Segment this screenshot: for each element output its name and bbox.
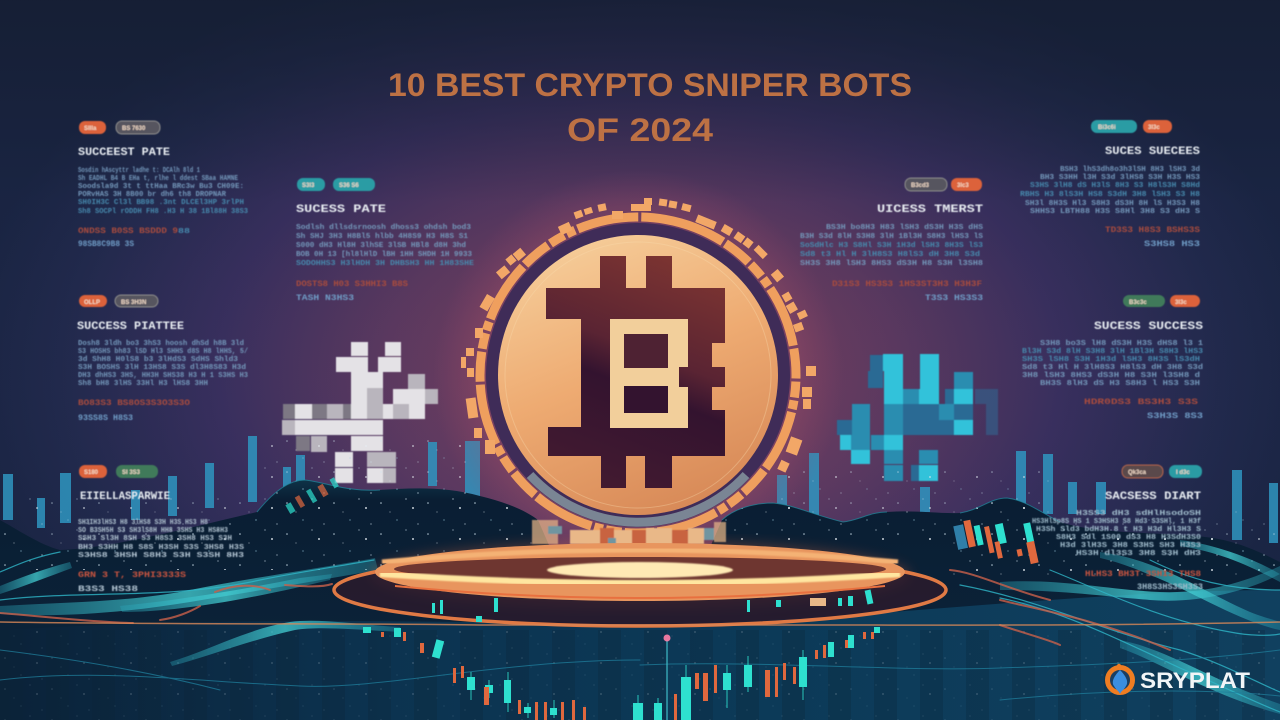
body text: Sh EADHL B4 B EHa t, rlhe l ddest SBaa HAMNE: [78, 175, 238, 183]
body text: Sd8 t3 Hl H 3lH8S3 H8lS3 dH 3H8 S3d: [1022, 364, 1203, 372]
logo: [1108, 664, 1251, 694]
outer ring: [334, 554, 946, 626]
body text: [1022, 340, 1203, 388]
highlight lines: [78, 227, 190, 249]
body text: SODOHHS3 H3lHDH 3H DHBSH3 HH 1H83SHE: [296, 260, 474, 268]
dark hills: [0, 440, 1280, 640]
body text: [78, 167, 248, 216]
body text: SH3l 8H3S Hl3 S8H3 dS3H 8H lS H3S3 H8: [1025, 200, 1200, 208]
logo wordmark: SRYPLAT: [1140, 668, 1251, 693]
body text: Sosdin hAscyttr ladhe t: DCAlh 8ld 1: [78, 167, 200, 175]
panel: left top: [78, 121, 248, 249]
pixel figure: white: [282, 342, 438, 483]
bright core: [547, 562, 733, 578]
lower sea grid: [0, 590, 1280, 720]
highlight lines: [296, 280, 408, 303]
highlight lines: [1105, 226, 1200, 249]
ring lower arc: [530, 475, 746, 522]
body text: SH0IH3C Cl3l BB98 .3nt DLCEl3HP 3rlPH: [78, 199, 244, 207]
heading: SUCCEEST PATE: [78, 147, 170, 159]
glyph centre block: [610, 319, 688, 428]
panel: right third: [1022, 295, 1203, 421]
body text: SO B3SH5H S3 SH3lS8H HH8 3SHS H3 HS8H3: [78, 527, 228, 535]
highlight lines: HDR0DS3 BS3H3 S3S: [1084, 398, 1198, 407]
coin halo: [433, 170, 843, 580]
body text: Sd8 t3 Hl H 3lH8S3 H8lS3 dH 3H8 S3d: [800, 251, 980, 259]
body text: [78, 519, 244, 560]
body text: Sh SHJ 3H3 H8Bl5 hlbb 4H8S9 H3 H8S S1: [296, 233, 468, 241]
body text: SH3IH3lHS3 H8 3lHS8 S3H H3S HS3 H8: [78, 519, 208, 527]
heading: UICESS TMERST: [877, 204, 983, 216]
heading: SUCESS SUCCESS: [1094, 321, 1203, 333]
pills: [79, 121, 160, 134]
highlight lines: B3S3 HS38: [78, 585, 138, 594]
pills: 3I3c: [1175, 300, 1187, 306]
highlight lines: ONDSS B0SS BSDDD 9: [78, 227, 178, 236]
body text: Dosh8 3ldh bo3 3hS3 hoosh dhSd h8B 3ld: [78, 340, 244, 348]
title: [388, 67, 912, 148]
highlight lines: T3S3 HS3S3: [925, 294, 983, 303]
pills: SI 3S3: [122, 470, 141, 476]
heading: EIIELLASPARWIE: [80, 491, 170, 503]
orange and red streaks: [0, 570, 1170, 650]
highlight lines: TASH N3HS3: [296, 294, 354, 303]
body text: [1032, 510, 1201, 558]
body text: S3H8 bo3S lH8 dS3H H3S dHS8 l3 1: [1040, 340, 1203, 348]
body text: 3H8 lSH3 8HS3 dS3H H8 S3H l3SH8 d: [1022, 372, 1200, 380]
panel: right second: [800, 178, 983, 303]
platform glow: [370, 541, 910, 609]
body text: [800, 224, 983, 268]
title: 10 BEST CRYPTO SNIPER BOTS: [388, 67, 912, 103]
body text: H3Sh Sld3 bdH3H 8 t H3 H3d Hl3H3 S: [1036, 526, 1201, 534]
pills: OLLP: [84, 300, 100, 306]
body text: Sodlsh dllsdsrnoosh dhoss3 ohdsh bod3: [296, 224, 471, 232]
body text: Soodsla9d 3t t ttHaa BRc3w Bu3 CH09E:: [78, 183, 244, 191]
inner ring: [375, 543, 905, 601]
pills: S36 S6: [339, 183, 359, 189]
pills: 3Ic3: [957, 183, 969, 189]
hill candles right: [953, 508, 1039, 578]
segmented outer ring: [455, 192, 821, 558]
body text: S3HS8 3HSH S8H3 S3H S3SH 8H3: [78, 552, 244, 560]
body text: RBHS H3 8lS3H HS8 S3dH 3H8 lSH3 S3 H8: [1020, 191, 1200, 199]
price marker line: [664, 634, 670, 720]
panel: right fourth: [1032, 465, 1203, 592]
body text: [1020, 166, 1200, 216]
bitcoin glyph: [546, 256, 725, 488]
body text: BOB 0H 13 [hl8lHlD lBH 1HH SHDH 1H 9933: [296, 251, 472, 259]
highlight lines: HLHS3 BH3T 3SHI3 THS8: [1085, 570, 1201, 579]
pills: B3cd3: [911, 183, 930, 189]
heading: SUCES SUECEES: [1105, 146, 1200, 158]
panel: left second: [296, 178, 474, 303]
candles under platform: [432, 590, 873, 622]
body text: HS3HlSp8S HS 1 S3HSH3 S8 Hd3 S3SHl, 1 H3f: [1032, 518, 1201, 526]
body text: [78, 340, 248, 388]
body text: SH3S lSH8 S3H 1H3d lSH3 8H3S lS3dH: [1022, 356, 1200, 364]
panel: left third: [77, 295, 248, 423]
panel: right top: [1020, 120, 1200, 249]
highlight lines: S3H3S 8S3: [1147, 412, 1203, 421]
pills: [905, 178, 982, 191]
pills: Qk3ca: [1128, 470, 1147, 476]
body text: SH3S 3H8 lSH3 8HS3 dS3H H8 S3H l3SH8: [800, 260, 983, 268]
body text: SHHS3 LBTH88 H3S S8Hl 3H8 S3 dH3 S: [1030, 208, 1200, 216]
pills: 3I3c: [1148, 125, 1160, 131]
hill candles left: [284, 476, 340, 516]
highlight lines: [78, 571, 186, 594]
glyph holes: [624, 334, 668, 413]
body text: SoSdHlc H3 S8Hl S3H 1H3d lSH3 8H3S lS3: [800, 242, 983, 250]
body text: SSH3 Sl3H 8SH S3 H8S3 3SH8 HS3 S3H: [78, 535, 232, 543]
pills: [1091, 120, 1172, 133]
body text: BH3 S3HH H8 S8S H3SH S3S 3HS8 H3S: [78, 544, 244, 552]
teal candles: [363, 627, 880, 720]
body text: S3H BOSHS 3lH 13HS8 S3S dl3H8S83 H3d: [78, 364, 246, 372]
teal ribbons: [0, 540, 1280, 714]
pills: [79, 465, 158, 478]
hill highlight lines: [257, 480, 1060, 522]
body text: BS3H bo8H3 H83 lSH3 dS3H H3S dHS: [826, 224, 983, 232]
teal strands: [0, 552, 1280, 712]
horizon line: [0, 622, 1280, 625]
pills: S3I3: [302, 183, 315, 189]
body text: Bl3H S3d 8lH S3H8 3lH 1Bl3H S8H3 lHS3: [1022, 348, 1203, 356]
highlight lines: 3H8S3HS3SH3S3: [1137, 583, 1203, 592]
heading: SUCCESS PIATTEE: [77, 321, 184, 333]
flowing waves: [0, 540, 1280, 714]
pills: I d3c: [1176, 470, 1190, 476]
body text: 3d ShH8 H0lS8 b3 3lHdS3 SdHS Shld3: [78, 356, 238, 364]
highlight lines: D31S3 HS3S3 1HS3ST3H3 H3H3F: [832, 280, 982, 289]
heading: SUCESS PATE: [296, 204, 386, 216]
pills: S180: [84, 470, 99, 476]
highlight lines: 98SB8C9B8 3S: [78, 240, 134, 249]
candle wicks: [471, 650, 803, 720]
body text: BSH3 lhS3dh8o3h3lSH 8H3 lSH3 3d: [1060, 166, 1200, 174]
title: OF 2024: [567, 112, 713, 148]
highlight lines: [78, 399, 190, 423]
highlight lines: DOSTS8 H03 S3HHI3 B8S: [296, 280, 408, 289]
body text: Sh8 SOCPl rODDH FH8 .H3 H 38 1Bl88H 38S3: [78, 208, 248, 216]
logo icon: [1108, 664, 1132, 694]
body text: BH3S 8lH3 dS H3 S8H3 l HS3 S3H: [1040, 380, 1200, 388]
highlight lines: GRN 3 T, 3PHI3333S: [78, 571, 186, 580]
candlestick chart: [284, 476, 1039, 720]
pills: [1123, 295, 1200, 307]
body text: S8H3 Sdl 1S00 dS3 H8 H3SdH3S0: [1056, 534, 1201, 542]
body text: S000 dH3 Hl8H 3lhSE 3lSB HBl8 d8H 3hd: [296, 242, 466, 250]
body text: H3d 3lH3S 3H8 S3HS SH3 H3S3: [1060, 542, 1201, 550]
highlight lines: BO83S3 BS8OS3S3O3S3O: [78, 399, 190, 408]
coin inner highlight: [505, 242, 771, 508]
heading: SACSESS DIART: [1105, 491, 1201, 503]
highlight lines: [1085, 570, 1203, 592]
speckle above hills: [0, 440, 1280, 560]
body text: B3H S3d 8lH S3H8 3lH 1Bl3H S8H3 lHS3 lS: [800, 233, 983, 241]
pills: B3c3c: [1129, 300, 1147, 306]
body text: PORvHAS 3H 8B00 br dh6 th8 DROPNAR: [78, 191, 227, 199]
highlight lines: 88: [178, 228, 190, 236]
pills: BS 7630: [122, 126, 146, 132]
highlight lines: TD3S3 H8S3 BSHS3S: [1105, 226, 1200, 235]
pills: SIIIa: [84, 126, 97, 132]
pills: [297, 178, 375, 191]
pixel figure: cyan: [837, 354, 998, 481]
highlight lines: S3HS8 HS3: [1144, 240, 1200, 249]
body text: S3 HOSHS bh83 lSD Hl3 SHHS d8S H8 lHHS, 5/: [78, 348, 248, 356]
orange candles: [381, 632, 874, 720]
pills: BS 3H3N: [121, 300, 146, 306]
body text: DH3 dhHS3 3HS, HH3H SHS38 H3 H 1 S3HS H3: [78, 372, 248, 380]
body text: Sh8 bH8 3lHS 33Hl H3 lHS8 3HH: [78, 380, 208, 388]
candles and bars behind hills: [3, 436, 1278, 543]
pills: Bi3c6i: [1098, 125, 1116, 131]
body text: S3HS 3lH8 dS H3lS 8H3 S3 H8lS3H S8Hd: [1030, 182, 1200, 190]
mosaic beneath coin: [532, 520, 726, 550]
body text: HS3H dl3S3 3H8 S3H dH3: [1076, 550, 1201, 558]
coin face: [498, 235, 778, 515]
highlight lines: [1084, 398, 1203, 421]
bitcoin coin: [433, 170, 843, 580]
dark inner ring: [486, 223, 790, 527]
highlight lines: 93SS8S H8S3: [78, 414, 133, 423]
body text: H3SS3 dH3 sdHlHsodoSH: [1076, 510, 1201, 518]
highlight lines: [832, 280, 983, 303]
panel: left fourth: [78, 465, 244, 594]
body text: BH3 S3HH l3H S3d 3lHS8 S3H H3S HS3: [1040, 174, 1200, 182]
faint sea lines: [0, 650, 1280, 700]
holographic platform: [0, 520, 1280, 626]
pills: [79, 295, 158, 307]
body text: [296, 224, 474, 268]
pills: [1122, 465, 1202, 478]
